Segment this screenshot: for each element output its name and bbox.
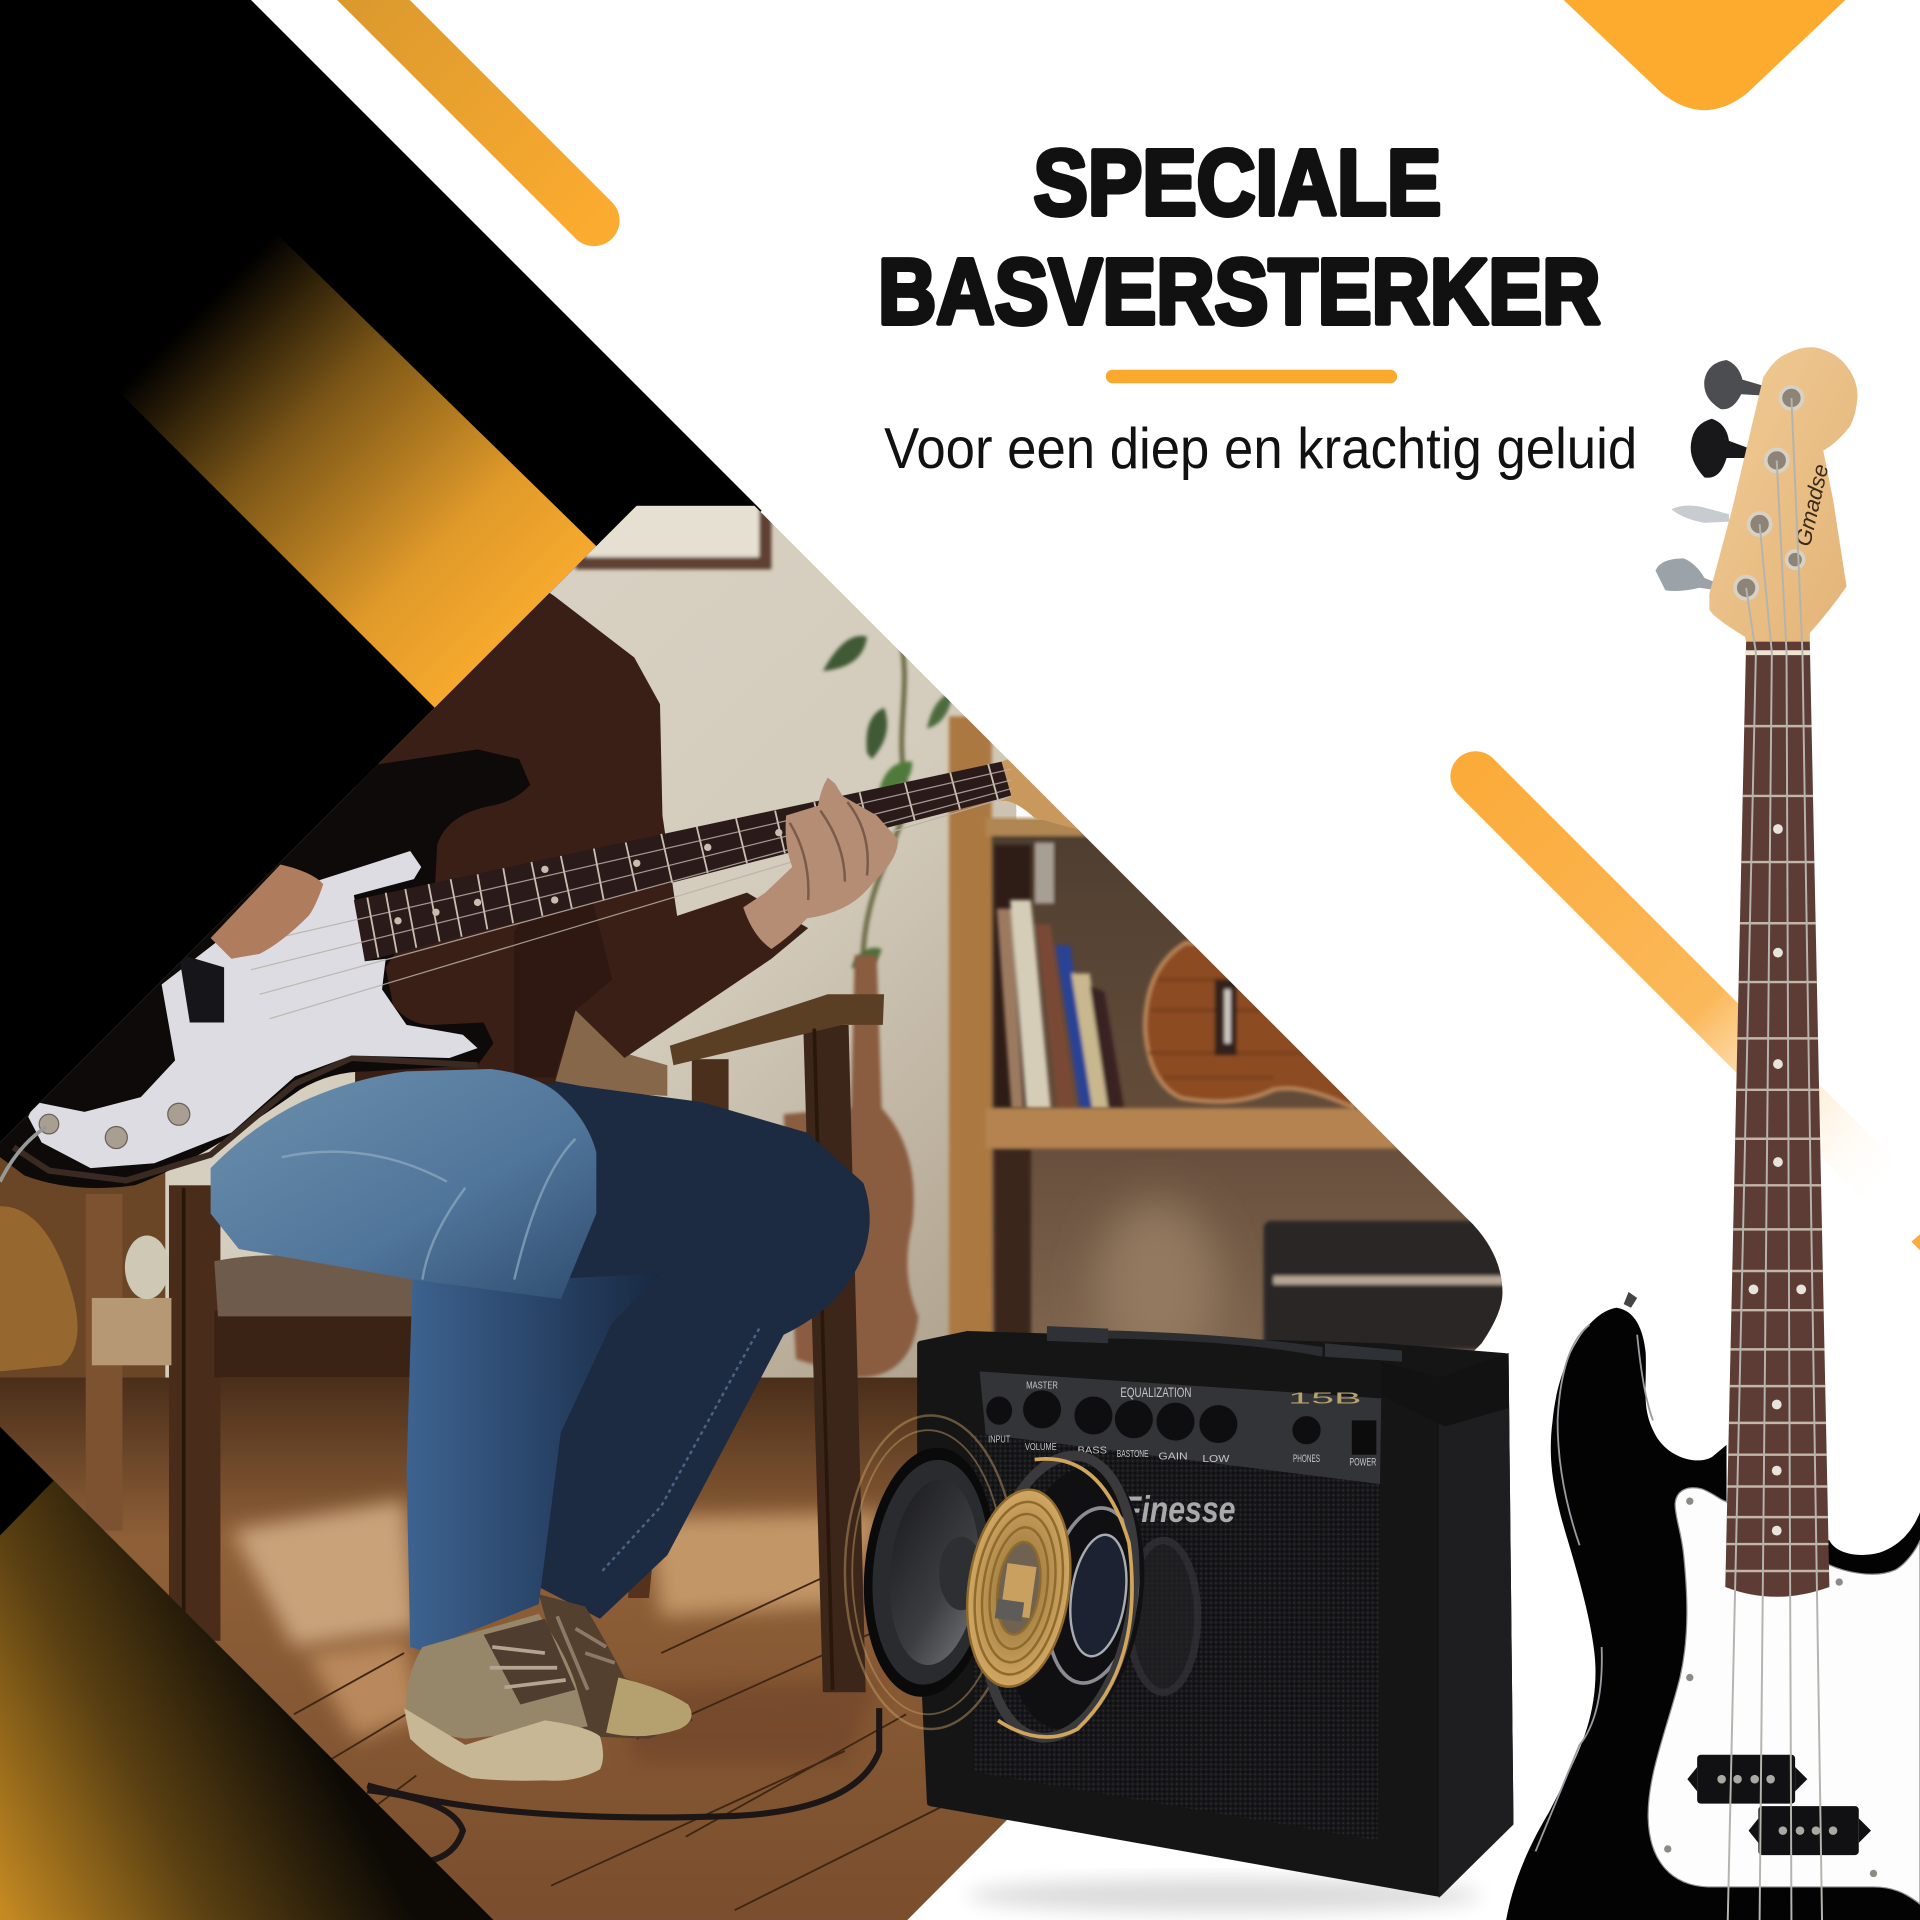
pickup bbox=[179, 954, 224, 1022]
jeans folds bbox=[282, 1139, 576, 1280]
small orange accent at right edge bbox=[1911, 1234, 1920, 1250]
control panel bbox=[980, 1371, 1381, 1484]
books bbox=[997, 900, 1124, 1108]
background acoustic guitar bbox=[784, 955, 918, 1378]
grille bbox=[971, 1433, 1380, 1840]
room background bbox=[0, 490, 1524, 1445]
power label: POWER bbox=[1349, 1457, 1376, 1469]
black diagonal background panel bbox=[0, 0, 762, 1273]
neck and fretboard bbox=[1720, 642, 1837, 1597]
orange gradient band bbox=[116, 233, 596, 708]
front shin jeans bbox=[407, 1273, 661, 1651]
plant bbox=[823, 636, 953, 980]
title bbox=[878, 130, 1600, 343]
picking hand bbox=[211, 864, 323, 959]
volume label: VOLUME bbox=[1025, 1442, 1057, 1453]
gold gradient shape bbox=[0, 1480, 493, 1920]
black triangle bottom left bbox=[0, 1427, 493, 1920]
amp cabinet bbox=[921, 1335, 1510, 1893]
pickguard bbox=[28, 851, 478, 1168]
chair bbox=[86, 994, 884, 1692]
title line 1: SPECIALE bbox=[1033, 130, 1441, 234]
body highlights bbox=[1536, 1325, 1653, 1851]
watt label: 15B bbox=[1288, 1390, 1362, 1407]
tuner posts bbox=[1735, 387, 1804, 599]
body black bbox=[0, 749, 530, 1188]
jeans stitching bbox=[600, 1329, 759, 1573]
amp corner protector bbox=[1381, 1353, 1509, 1427]
picture frame bbox=[576, 496, 771, 569]
input label: INPUT bbox=[988, 1434, 1010, 1445]
power switch bbox=[1352, 1420, 1376, 1455]
tuning keys bbox=[1656, 360, 1763, 591]
basket inner bbox=[1063, 1531, 1134, 1660]
amplifier bbox=[921, 1326, 1513, 1898]
amp side bbox=[1439, 1353, 1513, 1898]
strap button bbox=[1624, 1292, 1637, 1308]
ukulele bbox=[1145, 943, 1359, 1108]
gold ring edge bbox=[998, 1459, 1132, 1737]
fret dots bbox=[394, 829, 782, 924]
strings bbox=[245, 769, 1011, 1019]
equalization label: EQUALIZATION bbox=[1120, 1385, 1191, 1400]
frets bbox=[367, 764, 998, 958]
master label: MASTER bbox=[1026, 1381, 1058, 1392]
bass guitar in photo bbox=[0, 747, 1090, 1188]
rear magnet bbox=[1129, 1540, 1198, 1692]
wooden shelf post bbox=[949, 716, 992, 1353]
shirt bbox=[355, 585, 808, 1084]
speaker ring bbox=[967, 1446, 1152, 1748]
phones label: PHONES bbox=[1293, 1453, 1320, 1465]
basket metal ring bbox=[1036, 1502, 1148, 1689]
headstock bbox=[1709, 347, 1858, 642]
subtitle: Voor een diep en krachtig geluid bbox=[884, 417, 1637, 481]
background amplifier box bbox=[1264, 1221, 1509, 1349]
body edge highlight bbox=[13, 1058, 478, 1180]
fretting hand bbox=[743, 778, 898, 949]
back leg jeans bbox=[540, 1081, 870, 1619]
divider bar bbox=[1106, 370, 1397, 383]
headstock logo: Gmadse bbox=[1790, 462, 1833, 548]
chair back slats bbox=[555, 1010, 668, 1096]
pickguard screws bbox=[1664, 1498, 1877, 1877]
orange corner shape top right bbox=[1564, 0, 1845, 110]
fretboard bbox=[354, 762, 1011, 961]
pickups bbox=[1687, 1755, 1871, 1855]
knobs bbox=[986, 1390, 1321, 1445]
position dots bbox=[1749, 824, 1806, 1536]
gold voice coil bbox=[955, 1483, 1082, 1693]
amp strap mounts bbox=[1047, 1326, 1402, 1362]
back shoe bbox=[539, 1594, 693, 1739]
speaker cone bbox=[854, 1442, 1005, 1702]
upper shelf ledge bbox=[986, 818, 1090, 836]
jack cable bbox=[0, 1127, 47, 1182]
title line 2: BASVERSTERKER bbox=[878, 239, 1600, 343]
exploded speaker bbox=[845, 1416, 1198, 1748]
thigh jeans bbox=[211, 1069, 596, 1299]
low label: LOW bbox=[1202, 1454, 1230, 1465]
left wall guitar bbox=[0, 1206, 78, 1371]
front shoe bbox=[404, 1614, 603, 1781]
cable on floor bbox=[367, 1708, 879, 1861]
wooden floor bbox=[0, 1378, 1008, 1920]
knobs bbox=[39, 1103, 190, 1149]
photo: bassist in living room bbox=[0, 490, 1524, 1920]
wooden shelf bbox=[986, 1108, 1414, 1149]
orange diagonal stroke right fading bbox=[1476, 776, 1910, 1211]
amp handle bbox=[1047, 1330, 1322, 1357]
headstock bbox=[998, 747, 1090, 833]
strings bbox=[1728, 398, 1822, 1920]
treble label: BASS bbox=[1078, 1445, 1107, 1456]
brand logo: Finesse bbox=[1123, 1489, 1236, 1530]
speaker basket bbox=[990, 1458, 1160, 1738]
product bass guitar bbox=[1506, 347, 1920, 1920]
body bbox=[1506, 1308, 1920, 1920]
gain label: GAIN bbox=[1158, 1452, 1188, 1463]
glow rings bbox=[845, 1416, 1016, 1729]
frets bbox=[1720, 653, 1837, 1571]
mid label: BASTONE bbox=[1117, 1449, 1149, 1460]
amp labels bbox=[988, 1381, 1376, 1469]
amp soft shadow bbox=[967, 1878, 1482, 1913]
pickguard bbox=[1648, 1488, 1920, 1904]
shirt shadow bbox=[514, 857, 612, 1078]
orange diagonal stroke top bbox=[349, 0, 594, 220]
